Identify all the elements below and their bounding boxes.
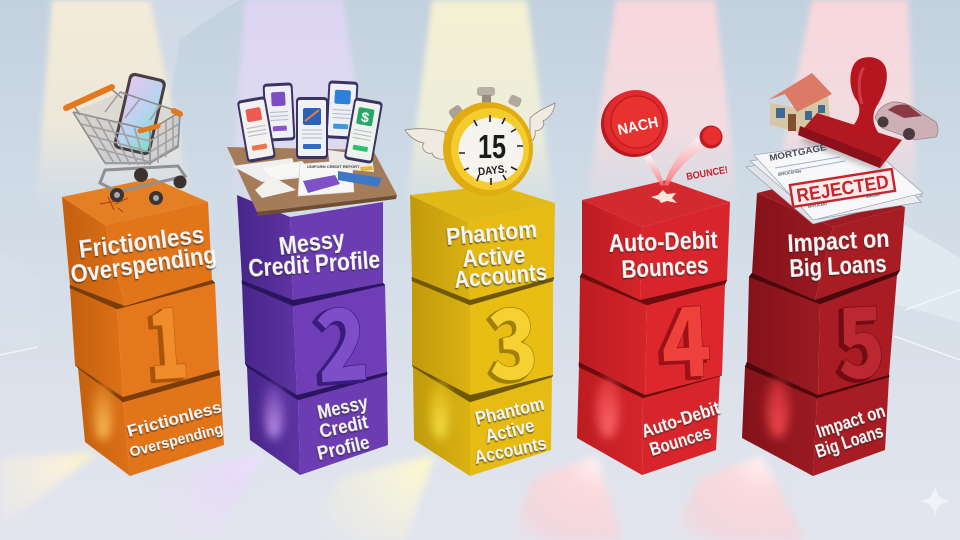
red middle block xyxy=(579,273,727,395)
icon: house and car xyxy=(768,73,938,140)
label bottom: Frictionless Overspending xyxy=(125,397,225,461)
document: mortgage application rejected: AMOUNT xyxy=(866,192,882,199)
label bottom: Auto-Debit Bounces: Bounces xyxy=(647,422,713,460)
number 5: 5 xyxy=(829,266,884,410)
column 4: auto-debit bounces xyxy=(577,90,730,475)
number 2: 2 xyxy=(307,266,369,414)
label bottom: Frictionless Overspending: Overspending xyxy=(128,420,225,461)
floor light pools xyxy=(0,453,805,540)
label top: Messy Credit Profile: Credit Profile xyxy=(247,246,381,283)
label bottom: Auto-Debit Bounces: Auto-Debit xyxy=(639,398,722,442)
column 1: frictionless overspending xyxy=(62,72,225,476)
icon: desk with phones, receipts and credit cards: $ xyxy=(360,109,371,126)
label top: Frictionless Overspending: Frictionless xyxy=(77,221,206,264)
purple middle block xyxy=(242,280,387,395)
icon: sparkle watermark xyxy=(919,485,951,517)
label top: Phantom Active Accounts: Accounts xyxy=(453,259,548,294)
orange top block xyxy=(62,178,212,306)
document: mortgage application rejected: REJECTED xyxy=(795,172,890,207)
label bottom: Impact on Big Loans: Impact on xyxy=(814,401,888,442)
icon: winged stopwatch, 15 days: DAYS. xyxy=(478,163,508,178)
label top: Impact on Big Loans: Big Loans xyxy=(789,250,887,283)
yellow top block xyxy=(410,185,555,300)
icon: winged stopwatch, 15 days: 15 xyxy=(478,128,506,165)
icon: desk with phones, receipts and credit cards: UNIFORM CREDIT REPORT xyxy=(307,164,360,169)
label bottom: Phantom Active Accounts: Phantom xyxy=(473,394,546,429)
number 1: 1 xyxy=(143,265,192,409)
label bottom: Impact on Big Loans: Big Loans xyxy=(813,421,886,462)
column 3: phantom active accounts xyxy=(405,87,555,476)
icon: red rubber stamp xyxy=(798,57,902,172)
label top: Phantom Active Accounts xyxy=(445,216,548,294)
yellow bottom block xyxy=(412,365,553,476)
label top: Frictionless Overspending: Overspending xyxy=(69,241,218,289)
label bottom: Messy Credit Profile: Credit xyxy=(318,412,371,443)
dark red middle block xyxy=(747,270,900,395)
purple top block xyxy=(237,195,383,300)
label top: Auto-Debit Bounces: Bounces xyxy=(621,251,709,284)
icon: desk with phones, receipts and credit cards xyxy=(227,80,397,216)
label top: Impact on Big Loans: Impact on xyxy=(787,225,890,258)
label bottom: Phantom Active Accounts: Active xyxy=(483,415,536,447)
column 2: messy credit profile xyxy=(227,80,397,475)
dark red bottom block xyxy=(742,362,889,476)
label top: Messy Credit Profile xyxy=(247,225,381,283)
orange middle block xyxy=(70,280,219,397)
number 4: 4 xyxy=(657,263,714,406)
red top block xyxy=(582,180,730,300)
label bottom: Messy Credit Profile xyxy=(315,393,372,465)
document: mortgage application rejected: MORTGAGE xyxy=(768,142,827,163)
icon: NACH coin bouncing: NACH xyxy=(616,114,660,139)
orange bottom block xyxy=(75,365,224,476)
number 1: 1 xyxy=(139,267,188,411)
column 5: impact on big loans xyxy=(742,57,938,476)
number 3: 3 xyxy=(481,267,538,410)
label top: Impact on Big Loans xyxy=(787,225,890,283)
label top: Messy Credit Profile: Messy xyxy=(277,225,346,261)
number 2: 2 xyxy=(310,263,372,412)
top light beams xyxy=(35,0,918,215)
red bottom block xyxy=(577,362,722,475)
dark red top block xyxy=(752,178,905,300)
label bottom: Auto-Debit Bounces xyxy=(639,398,722,460)
label top: Phantom Active Accounts: Active xyxy=(462,242,526,273)
icon: NACH coin bouncing: BOUNCE! xyxy=(686,165,729,183)
number 3: 3 xyxy=(484,265,541,408)
icon: winged stopwatch, 15 days xyxy=(405,87,555,196)
label bottom: Impact on Big Loans xyxy=(813,401,888,462)
label bottom: Phantom Active Accounts xyxy=(473,394,548,468)
label top: Auto-Debit Bounces xyxy=(608,226,719,284)
document: mortgage application rejected: APPLICANT xyxy=(808,202,829,209)
document: mortgage application rejected: APPLICATION xyxy=(778,169,802,177)
label bottom: Phantom Active Accounts: Accounts xyxy=(473,433,548,468)
label top: Phantom Active Accounts: Phantom xyxy=(445,216,538,251)
icon: shopping cart with phone xyxy=(66,72,186,205)
label bottom: Messy Credit Profile: Profile xyxy=(315,432,372,465)
document: mortgage application rejected xyxy=(746,140,923,224)
number 4: 4 xyxy=(653,265,710,408)
icon: NACH coin bouncing xyxy=(601,90,729,203)
label top: Auto-Debit Bounces: Auto-Debit xyxy=(608,226,719,258)
label top: Frictionless Overspending xyxy=(69,221,218,289)
number 5: 5 xyxy=(833,264,888,408)
label bottom: Frictionless Overspending: Frictionless xyxy=(125,397,224,441)
purple bottom block xyxy=(245,363,388,475)
label bottom: Messy Credit Profile: Messy xyxy=(316,393,370,424)
yellow middle block xyxy=(412,277,554,395)
